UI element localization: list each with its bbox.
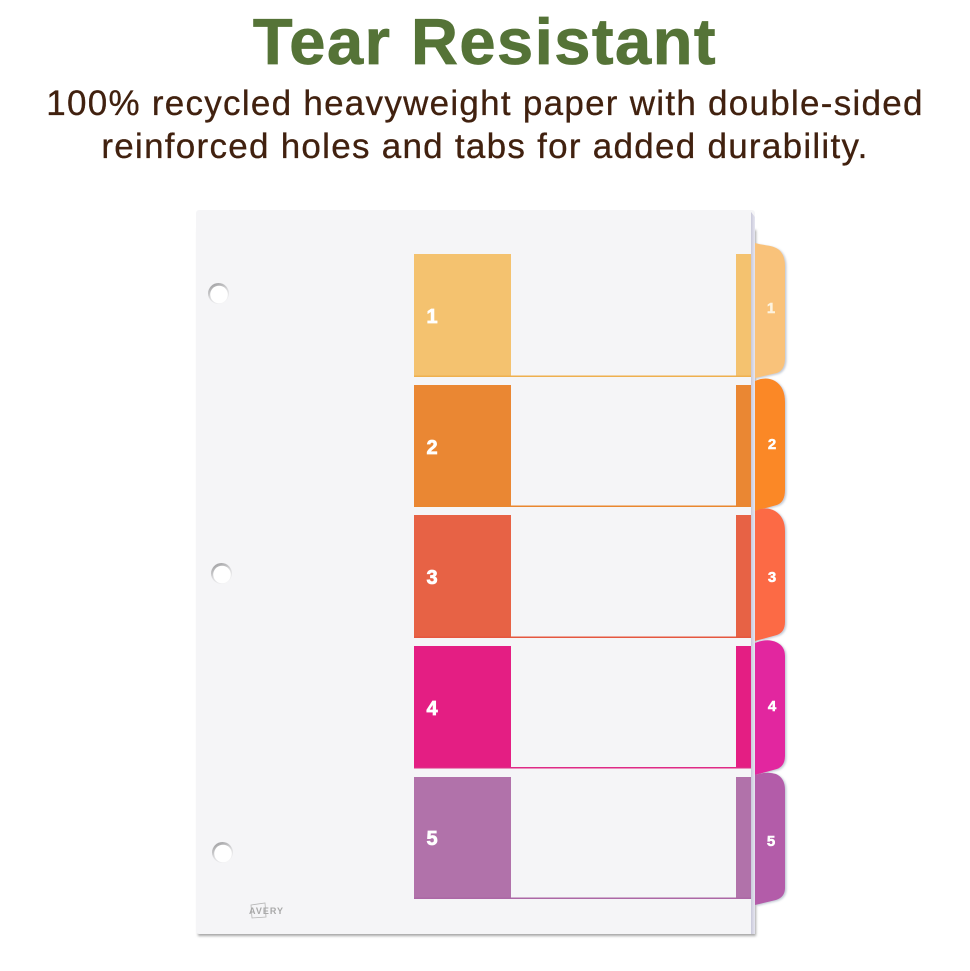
- tab: 3: 3: [768, 569, 776, 586]
- tab: 4: [755, 640, 785, 775]
- tab: 1: 1: [767, 300, 775, 317]
- subtitle: 100% recycled heavyweight paper with double-sided: [46, 84, 924, 123]
- row 2: 2: [426, 437, 438, 459]
- row 4: 4: [426, 698, 438, 720]
- sheet: [196, 210, 755, 934]
- row 5: 5: [426, 828, 438, 850]
- subtitle: [46, 84, 924, 166]
- sheet fold edge: [751, 212, 755, 934]
- tab: 3: [755, 508, 785, 641]
- tab: 2: [755, 378, 785, 511]
- row 3: 3: [426, 567, 438, 589]
- avery logo: AVERY: [249, 906, 283, 916]
- row 1: 1: [426, 306, 438, 328]
- tab: 4: 4: [768, 698, 777, 715]
- sheet shadow: [198, 230, 756, 936]
- tab: 5: [755, 773, 785, 905]
- avery logo: [249, 903, 283, 918]
- tab: 2: 2: [768, 436, 776, 453]
- hole 3: [212, 842, 233, 863]
- row 4: [414, 646, 751, 768]
- tab: 1: [755, 243, 785, 378]
- subtitle: reinforced holes and tabs for added durability.: [101, 127, 869, 166]
- row 1: [414, 254, 751, 377]
- title: Tear Resistant: [253, 5, 717, 78]
- row 5: [414, 777, 751, 899]
- hole 1: [208, 283, 229, 304]
- hole 2: [211, 563, 232, 584]
- tab: 5: 5: [767, 833, 775, 850]
- row 3: [414, 515, 751, 638]
- row 2: [414, 385, 751, 507]
